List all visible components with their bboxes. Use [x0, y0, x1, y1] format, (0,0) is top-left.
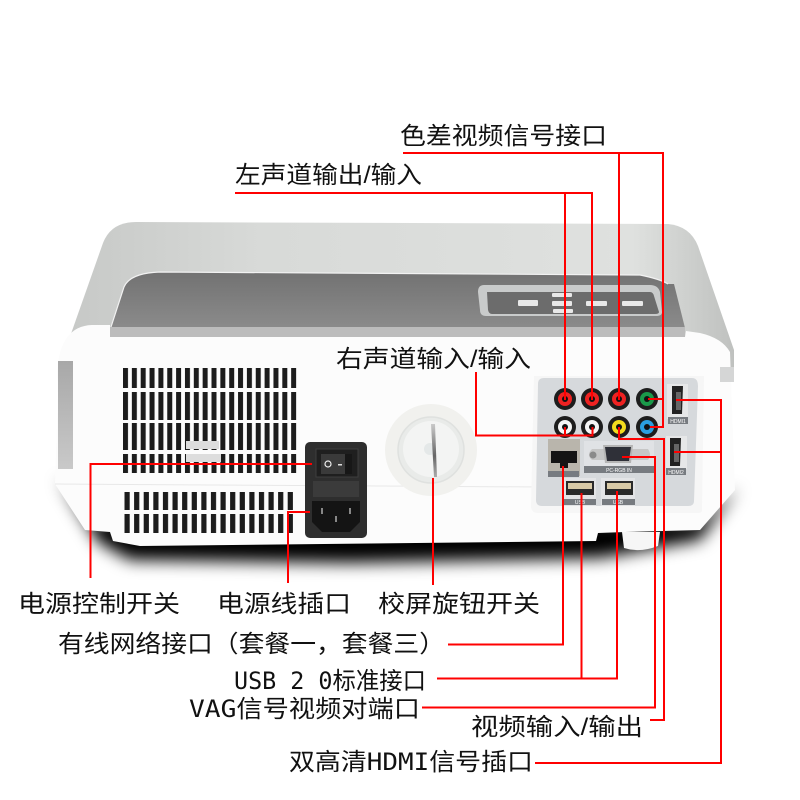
- top control band: [110, 272, 685, 337]
- USB port 1: USB: [575, 500, 586, 506]
- label: VGA: VAG信号视频对端口: [189, 695, 420, 723]
- label: LAN: 有线网络接口（套餐一，套餐三）: [58, 631, 445, 658]
- leader: right audio: [476, 372, 592, 436]
- leader: component video: [403, 153, 663, 427]
- leader: power switch: [90, 464, 312, 578]
- leader: USB: [437, 491, 617, 678]
- label: left audio: 左声道输出/输入: [235, 162, 422, 189]
- VGA port: [584, 441, 654, 474]
- USB port 2: USB: [613, 500, 624, 506]
- rear white panel: [55, 325, 735, 546]
- leader: HDMI: [535, 400, 721, 763]
- power module: [305, 442, 367, 538]
- HDMI 1 port: HDMI1: [670, 419, 686, 425]
- leader: left audio: [235, 193, 592, 400]
- HDMI 1 port: [667, 384, 688, 425]
- rear port panel: [531, 376, 704, 513]
- drop shadow: [58, 478, 738, 563]
- leader: VGA: [422, 457, 655, 708]
- USB port 1: [564, 478, 596, 506]
- label: focus knob: 校屏旋钮开关: [378, 591, 540, 618]
- lower vent grille: [124, 492, 296, 533]
- RCA jacks: [554, 388, 658, 438]
- label: USB: USB 2 0标准接口: [234, 667, 426, 695]
- label: HDMI: 双高清HDMI信号插口: [289, 748, 533, 776]
- HDMI 2 port: [666, 436, 687, 476]
- leader: video in/out: [619, 427, 664, 720]
- HDMI 2 port: HDMI2: [668, 470, 684, 476]
- label: right audio: 右声道输入/输入: [336, 346, 531, 373]
- upper vent grille: [123, 368, 297, 473]
- leader: LAN: [448, 466, 563, 644]
- projector photo: [55, 222, 738, 563]
- label: power socket: 电源线插口: [217, 591, 351, 618]
- label: component video: 色差视频信号接口: [400, 123, 607, 150]
- control buttons panel: [478, 285, 662, 316]
- rubber foot: [622, 532, 660, 550]
- VGA port: PC-RGB IN: [606, 468, 632, 474]
- label: power switch: 电源控制开关: [18, 591, 180, 618]
- label: video in/out: 视频输入/输出: [471, 714, 643, 741]
- projector top surface: [60, 222, 734, 380]
- leader: power socket: [288, 512, 310, 583]
- right side tab: [720, 367, 734, 382]
- left side silver strip: [58, 361, 73, 469]
- leader: focus knob: [432, 478, 434, 585]
- RJ45 LAN port: [548, 439, 580, 477]
- USB port 2: [601, 478, 635, 506]
- focus knob: [385, 404, 477, 496]
